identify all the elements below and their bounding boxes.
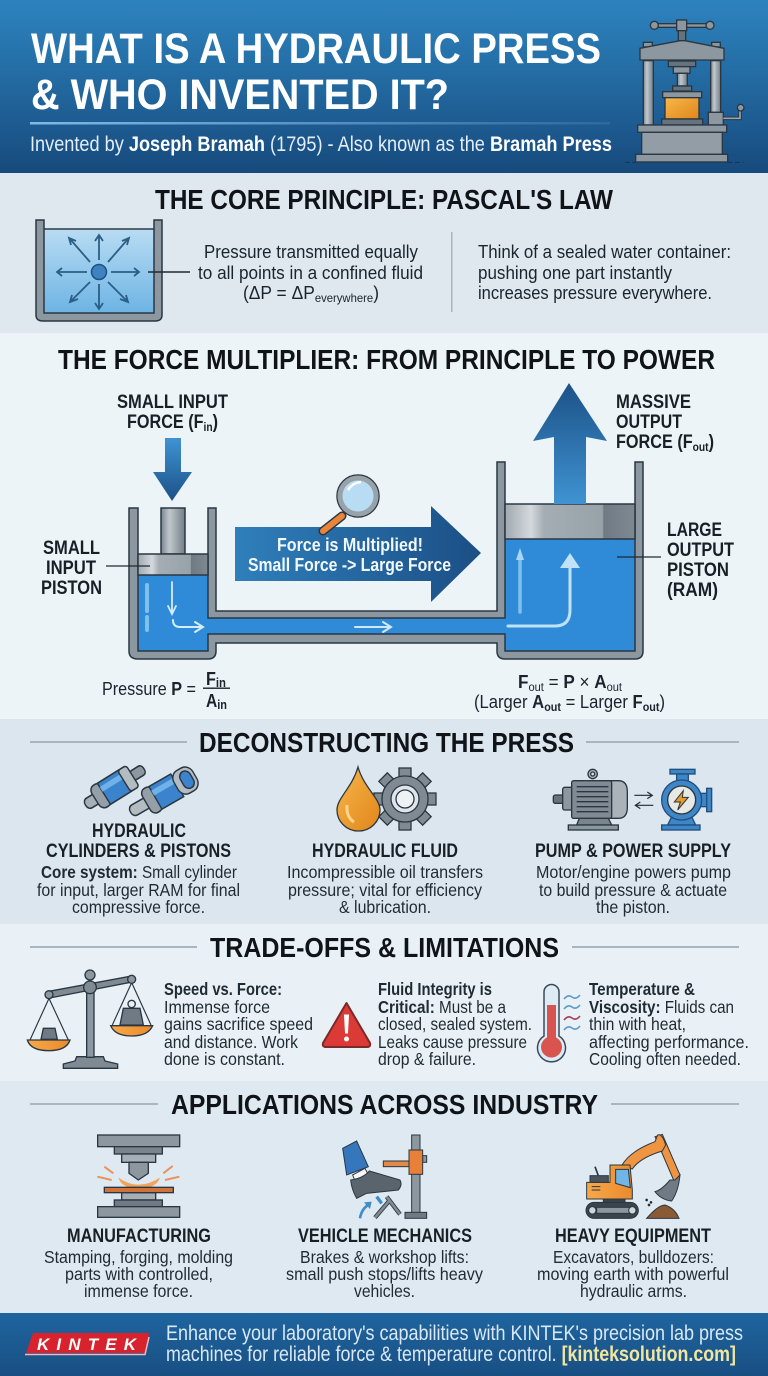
text: speed vs force: Speed vs. Force: <box>164 979 282 999</box>
label: vehicle mechanics: vehicles. <box>354 1281 415 1301</box>
text: temperature and viscosity <box>589 979 749 1069</box>
icon: foot on pedal and lift <box>343 1135 427 1218</box>
text: fluid integrity: Leaks cause pressure <box>378 1032 527 1052</box>
label: pump and power supply <box>535 841 731 917</box>
text: speed vs force: Immense force <box>164 997 270 1017</box>
text: speed vs force: gains sacrifice speed <box>164 1014 313 1034</box>
label: heavy equipment: Excavators, bulldozers: <box>553 1247 714 1267</box>
label: vehicle mechanics: VEHICLE MECHANICS <box>298 1226 472 1247</box>
text: pressure definition: ) <box>373 282 379 303</box>
formula: output force: = <box>544 671 563 692</box>
label: massive output force: OUTPUT <box>616 412 682 433</box>
label: manufacturing: immense force. <box>84 1281 193 1301</box>
callout: force is multiplied arrow: Force is Multiplied! <box>277 535 423 555</box>
text: sealed container analogy: increases pressure everywhere. <box>478 282 712 303</box>
panel: applications <box>0 1081 768 1313</box>
label: hydraulic fluid: Incompressible oil transfers <box>287 862 483 882</box>
label: hydraulic cylinders and pistons: CYLINDERS & PISTONS <box>46 841 231 862</box>
title: WHAT IS A HYDRAULIC PRESS <box>31 25 601 73</box>
text: temperature and viscosity: Cooling often needed. <box>589 1049 741 1069</box>
text: pressure definition: (ΔP = ΔP <box>243 282 319 303</box>
text: temperature and viscosity: Temperature & <box>589 979 695 999</box>
label: large output piston: OUTPUT <box>667 540 734 561</box>
label: hydraulic cylinders and pistons <box>37 821 240 917</box>
formula: output force: P × A <box>563 671 608 692</box>
formula: output force: ) <box>659 691 665 712</box>
flow arrows <box>147 555 570 632</box>
vessel walls <box>129 462 643 659</box>
text: fluid integrity <box>378 979 532 1069</box>
icon: motor and pump <box>553 769 712 830</box>
panel: force multiplier <box>0 333 768 719</box>
formula: output force: F <box>633 691 643 712</box>
label: small input piston: PISTON <box>41 578 102 599</box>
icon: balance scale <box>27 970 153 1068</box>
icon: hydraulic press <box>625 20 744 162</box>
text: call to action <box>166 1322 743 1366</box>
formula: pressure: in <box>216 675 226 690</box>
text: fluid integrity: Critical: Must be a <box>378 997 506 1017</box>
label: heavy equipment: hydraulic arms. <box>580 1281 687 1301</box>
text: fluid integrity: Fluid Integrity is <box>378 979 492 999</box>
text: sealed container analogy: Think of a sealed water container: <box>478 241 731 262</box>
text: sealed container analogy: pushing one part instantly <box>478 262 673 283</box>
label: manufacturing: parts with controlled, <box>65 1264 213 1284</box>
label: heavy equipment <box>537 1226 729 1301</box>
fluid <box>138 539 635 651</box>
label: hydraulic cylinders and pistons: Core system: Small cylinder <box>41 862 237 882</box>
label: pump and power supply: the piston. <box>596 897 670 917</box>
label: large output piston: (RAM) <box>667 580 718 601</box>
label: small input piston: INPUT <box>46 558 96 579</box>
text: temperature and viscosity: affecting performance. <box>589 1032 749 1052</box>
label: hydraulic fluid: pressure; vital for efficiency <box>288 880 482 900</box>
label: massive output force: FORCE (F <box>616 432 706 453</box>
text: call to action: machines for reliable force & temperature control. [kinteksolution.com] <box>166 1343 736 1366</box>
label: large output piston <box>617 520 734 601</box>
formula: output force: out <box>528 680 544 694</box>
panel: deconstructing the press <box>0 719 768 924</box>
callout: force is multiplied arrow <box>235 506 481 602</box>
logo: KINTEK: KINTEK <box>37 1335 138 1354</box>
text: fluid integrity: drop & failure. <box>378 1049 476 1069</box>
heading: core principle: THE CORE PRINCIPLE: PASCAL'S LAW <box>155 184 613 215</box>
icon: gear and oil drop <box>337 767 436 831</box>
label: hydraulic cylinders and pistons: compressive force. <box>72 897 205 917</box>
text: temperature and viscosity: Viscosity: Fluids can <box>589 997 734 1017</box>
heading: deconstructing: DECONSTRUCTING THE PRESS <box>199 727 574 758</box>
formula: pressure: A <box>206 690 219 711</box>
label: hydraulic fluid: HYDRAULIC FLUID <box>312 841 458 862</box>
text: speed vs force: done is constant. <box>164 1049 285 1069</box>
label: hydraulic cylinders and pistons: HYDRAULIC <box>92 821 186 842</box>
text: speed vs force <box>164 979 313 1069</box>
icon: magnifying glass <box>323 475 379 531</box>
icon: thermometer <box>538 985 580 1062</box>
label: vehicle mechanics <box>286 1226 483 1301</box>
formula: output force: (Larger A <box>474 691 546 712</box>
label: vehicle mechanics: small push stops/lifts heavy <box>286 1264 483 1284</box>
text: pressure definition: everywhere <box>315 291 373 305</box>
arrow: output force <box>533 383 607 504</box>
large piston <box>505 504 635 539</box>
label: heavy equipment: moving earth with powerful <box>537 1264 729 1284</box>
title: & WHO INVENTED IT? <box>31 71 449 119</box>
label: heavy equipment: HEAVY EQUIPMENT <box>555 1226 711 1247</box>
text: sealed container analogy <box>478 241 731 303</box>
formula: pressure: Pressure P = <box>102 678 196 699</box>
icon: excavator <box>586 1134 680 1218</box>
formula: pressure: in <box>217 697 227 712</box>
icon: sealed tank with pressure arrows <box>36 220 190 321</box>
icon: warning triangle <box>323 1003 370 1047</box>
label: small input force: FORCE (F <box>127 412 217 433</box>
formula: output force <box>474 671 665 714</box>
label: massive output force: out <box>693 440 709 454</box>
label: pump and power supply: PUMP & POWER SUPPLY <box>535 841 731 862</box>
label: small input piston: SMALL <box>43 538 100 559</box>
arrow: input force <box>153 438 192 501</box>
label: small input force: in <box>204 420 213 434</box>
text: temperature and viscosity: thin with heat, <box>589 1014 686 1034</box>
small piston <box>138 508 208 575</box>
label: massive output force <box>616 392 714 454</box>
heading: applications: APPLICATIONS ACROSS INDUSTRY <box>171 1089 598 1120</box>
label: hydraulic fluid <box>287 841 483 917</box>
label: small input force: SMALL INPUT <box>117 392 228 413</box>
icon: stamping press <box>97 1135 180 1217</box>
label: small input force <box>117 392 228 434</box>
subtitle: Invented by Joseph Bramah (1795) - Also known as the Bramah Press <box>30 133 612 156</box>
label: small input force: ) <box>213 412 218 433</box>
label: pump and power supply: to build pressure & actuate <box>539 880 727 900</box>
callout: force is multiplied arrow: Small Force -> Large Force <box>248 555 451 575</box>
formula: pressure <box>102 668 230 712</box>
text: speed vs force: and distance. Work <box>164 1032 298 1052</box>
label: manufacturing: MANUFACTURING <box>67 1226 211 1247</box>
text: pressure definition: to all points in a confined fluid <box>198 262 423 283</box>
panel: trade-offs and limitations <box>0 924 768 1081</box>
diagram: hydraulic system <box>129 462 643 659</box>
label: hydraulic cylinders and pistons: for input, larger RAM for final <box>37 880 240 900</box>
heading: trade-offs: TRADE-OFFS & LIMITATIONS <box>210 932 559 963</box>
panel: core principle <box>0 173 768 333</box>
label: vehicle mechanics: Brakes & workshop lifts: <box>300 1247 469 1267</box>
panel: header <box>0 0 768 173</box>
icon: hydraulic cylinders <box>79 758 202 824</box>
formula: output force: out <box>544 700 561 714</box>
label: large output piston: PISTON <box>667 560 729 581</box>
formula: pressure: F <box>206 668 217 689</box>
formula: output force: = Larger <box>561 691 633 712</box>
text: pressure definition: Pressure transmitted equally <box>204 241 419 262</box>
label: manufacturing <box>44 1226 233 1301</box>
label: pump and power supply: Motor/engine powers pump <box>536 862 731 882</box>
text: fluid integrity: closed, sealed system. <box>378 1014 532 1034</box>
label: large output piston: LARGE <box>667 520 722 541</box>
label: small input piston <box>41 538 150 599</box>
formula: output force: F <box>518 671 528 692</box>
label: manufacturing: Stamping, forging, molding <box>44 1247 233 1267</box>
label: hydraulic fluid: & lubrication. <box>339 897 431 917</box>
text: pressure definition <box>198 241 423 305</box>
formula: output force: out <box>607 680 623 694</box>
label: massive output force: ) <box>709 432 714 453</box>
label: massive output force: MASSIVE <box>616 392 691 413</box>
panel: footer <box>0 1313 768 1376</box>
title <box>31 25 601 119</box>
formula: output force: out <box>643 700 659 714</box>
